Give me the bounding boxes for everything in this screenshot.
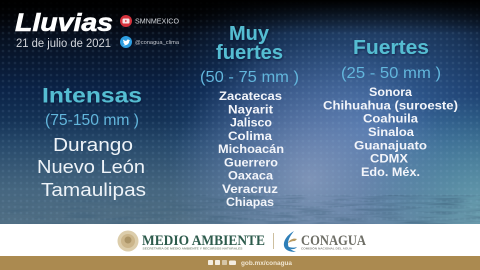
- heading: muy fuertes: [216, 23, 283, 64]
- panel: fuertes: [323, 37, 458, 179]
- logo text: medio ambiente: MEDIO AMBIENTE: [142, 233, 265, 249]
- list: muy fuertes states: Colima: [228, 131, 273, 143]
- heading: intensas: Intensas: [42, 84, 142, 108]
- list: intensas states: Tamaulipas: [41, 179, 146, 200]
- list: muy fuertes states: Nayarit: [228, 104, 273, 116]
- list: muy fuertes states: Oaxaca: [228, 170, 274, 182]
- range: fuertes: (25 - 50 mm ): [341, 65, 441, 82]
- list: muy fuertes states: Veracruz: [222, 184, 278, 196]
- list: muy fuertes states: Guerrero: [224, 157, 278, 169]
- list: muy fuertes states: Michoacán: [218, 144, 284, 156]
- icon: conagua: [284, 231, 297, 252]
- list: fuertes states: Chihuahua (suroeste): [323, 100, 458, 112]
- range: intensas: (75-150 mm ): [45, 112, 139, 129]
- icon: twitter: [120, 36, 132, 48]
- list: fuertes states: Guanajuato: [354, 140, 427, 152]
- heading: fuertes: Fuertes: [353, 37, 429, 59]
- list: muy fuertes states: Zacatecas: [219, 91, 282, 103]
- logo: conagua: [284, 231, 366, 252]
- list: fuertes states: Edo. Méx.: [361, 167, 420, 179]
- logo text: conagua: CONAGUA: [301, 233, 366, 249]
- list: fuertes states: [323, 87, 458, 179]
- footer: white logo band: [0, 224, 480, 256]
- social handle: youtube: SMNMEXICO: [135, 18, 180, 26]
- date: 21 de julio de 2021: [16, 38, 111, 50]
- list: fuertes states: Sonora: [369, 87, 413, 99]
- logo subtitle: secretaria: SECRETARÍA DE MEDIO AMBIENTE Y RECURSOS NATURALES: [142, 246, 242, 250]
- list: fuertes states: CDMX: [370, 154, 408, 166]
- list: fuertes states: Coahuila: [363, 114, 419, 126]
- title: Lluvias: [15, 9, 113, 37]
- social handle: twitter: @conagua_clima: [135, 40, 180, 46]
- footer: gold band: [0, 256, 480, 270]
- list: fuertes states: Sinaloa: [368, 127, 415, 139]
- footer url: gob.mx/conagua: [241, 260, 292, 267]
- range: muy fuertes: (50 - 75 mm ): [200, 69, 299, 86]
- heading: muy fuertes: Muy: [229, 23, 270, 45]
- divider: [273, 233, 274, 249]
- list: intensas states: Nuevo León: [37, 156, 145, 177]
- list: muy fuertes states: Jalisco: [230, 118, 272, 130]
- logo subtitle: comision: COMISIÓN NACIONAL DEL AGUA: [301, 246, 353, 250]
- icon: youtube: [120, 15, 132, 27]
- list: intensas states: [37, 134, 146, 200]
- list: muy fuertes states: [218, 91, 284, 209]
- panel: intensas: [37, 84, 146, 200]
- list: muy fuertes states: Chiapas: [226, 197, 274, 209]
- heading: muy fuertes: fuertes: [216, 42, 283, 64]
- list: intensas states: Durango: [53, 134, 133, 155]
- icon: national emblem: [118, 230, 138, 252]
- panel: muy fuertes: [200, 23, 299, 209]
- icons: social media: [208, 260, 236, 265]
- logo: medio ambiente: [118, 230, 265, 252]
